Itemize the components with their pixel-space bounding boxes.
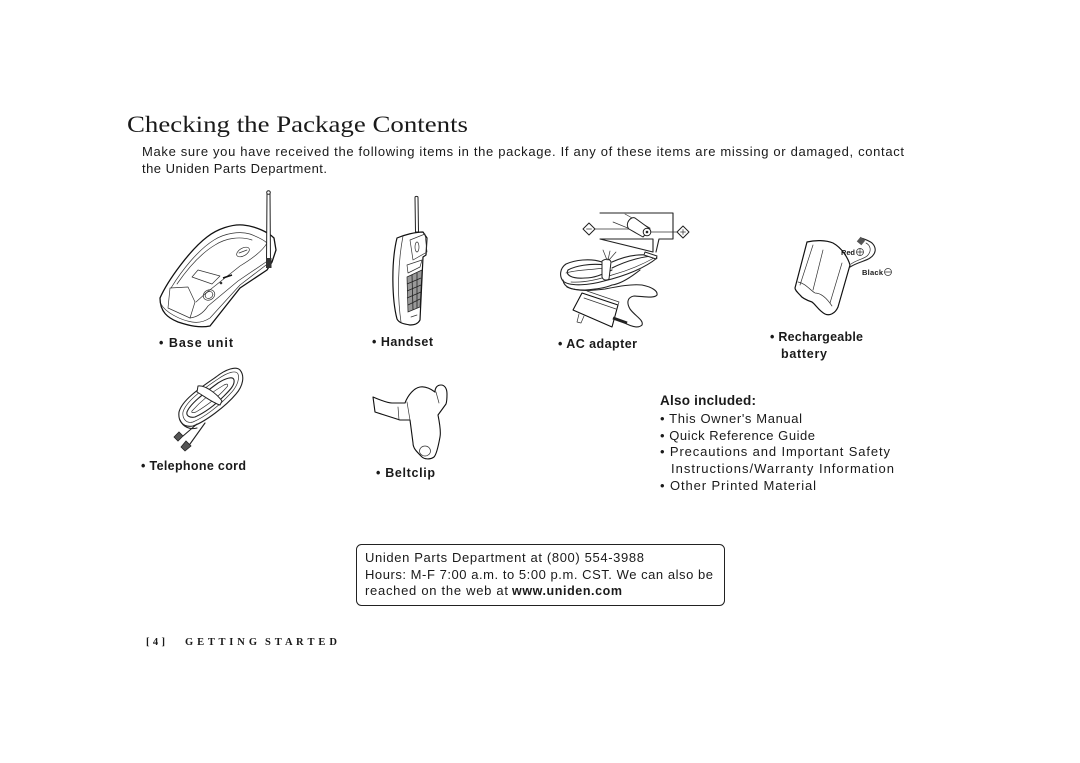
title: Checking the Package Contents [127,112,468,137]
label: AC adapter: • AC adapter [558,337,637,351]
intro paragraph: Make sure you have received the following items in the package. If any of these items are missing or damaged, contact [142,144,904,159]
contact box [356,544,724,606]
label: rechargeable battery: battery [781,347,827,361]
label: beltclip: • Beltclip [376,466,435,480]
contact box: reached on the web at [365,583,508,598]
footer: page number and section: G E T T I N G [185,637,257,648]
label: base unit: • Base unit [159,336,234,350]
also included list: • Precautions and Important Safety [660,444,890,459]
inset: plug polarity [583,213,689,252]
icon: handset [393,196,427,325]
icon: base unit [160,191,276,327]
icon: telephone cord [174,368,243,451]
coiled cord [561,258,657,285]
intro paragraph: the Uniden Parts Department. [142,161,327,176]
intro paragraph [142,144,904,176]
contact box: Uniden Parts Department at (800) 554-3988 [365,550,644,565]
label: handset: • Handset [372,335,434,349]
footer: page number and section [146,637,337,648]
also included list: • Other Printed Material [660,478,816,493]
icon: rechargeable battery: Red [841,248,855,257]
icon: AC adapter [561,213,689,327]
icon: rechargeable battery: Black [862,268,884,277]
label: rechargeable battery: • Rechargeable [770,330,863,344]
footer: page number and section: [ 4 ] [146,637,165,648]
label: telephone cord: • Telephone cord [141,459,246,473]
also included list [660,393,894,493]
icon: beltclip [373,385,447,459]
contact box: Hours: M-F 7:00 a.m. to 5:00 p.m. CST. We can also be [365,567,713,582]
footer: page number and section: S T A R T E D [265,637,337,648]
icon: rechargeable battery [795,237,892,315]
also included list: • Quick Reference Guide [660,428,815,443]
contact box: www.uniden.com [511,584,622,598]
label: rechargeable battery [770,330,863,361]
also included list: • This Owner's Manual [660,411,802,426]
heading: also included: Also included: [660,393,756,408]
plug [573,293,618,327]
also included list: Instructions/Warranty Information [671,461,894,476]
